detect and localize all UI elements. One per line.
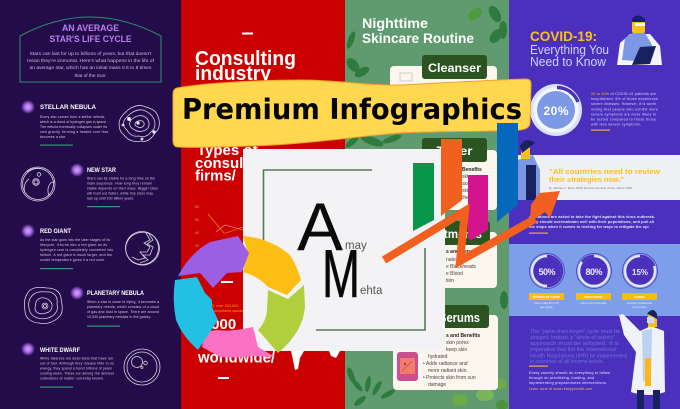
text: call to action: All nations are asked to take the fight against this virus outbreak. (529, 215, 655, 219)
stat: 15%: CASES (634, 295, 645, 299)
stage: stellar nebula: STELLAR NEBULA (40, 104, 96, 111)
closing text: implementing preparedness interventions. (529, 381, 607, 385)
quote strip: "All countries need to review (549, 169, 661, 176)
card: treatments: nate Skin (446, 257, 467, 263)
stage: planetary nebula: When a star is close to dying, it becomes a (87, 300, 159, 304)
stage: red giant: RED GIANT (40, 229, 71, 235)
heading: Need to Know (530, 55, 607, 69)
stage: stellar nebula: becomes a star. (40, 135, 66, 139)
donut: 20%: 20% (544, 104, 569, 118)
stat: 80%: 80% (586, 267, 602, 277)
card: serums (393, 305, 498, 390)
body text: The "panic-then-forget" cycle must be (530, 329, 620, 335)
body text (530, 329, 627, 365)
heading (530, 28, 609, 69)
doctor with clipboard (617, 16, 662, 65)
card: treatments: s and Benefits (446, 249, 480, 255)
stat: 50%: 50% (538, 267, 556, 277)
stage: stellar nebula: The nebula eventually collapses under its (40, 125, 107, 129)
card: toner: skin (462, 174, 471, 180)
panel: nighttime skincare (344, 0, 509, 409)
card: serums: hydrated (428, 354, 448, 360)
stage: planetary nebula: planetary nebula, which consists of a cloud (87, 305, 159, 309)
stage: new star: main sequence. How long they remain (87, 182, 152, 186)
card: treatments: Treatments (420, 229, 482, 241)
stat: 80%: INFECTIONS (584, 295, 603, 299)
stage: white dwarf (21, 342, 114, 388)
card: toner: Toner (436, 144, 473, 158)
stage: red giant: lifecycle, it turns into a red giant as its (40, 243, 107, 247)
paragraph: severe illnesses. However, it is worth (591, 102, 656, 106)
stage: stellar nebula: own gravity, forming a heated core that (40, 130, 108, 134)
stage: planetary nebula: PLANETARY NEBULA (87, 290, 144, 297)
stat: 50%: men in late 30 to 50 (534, 301, 559, 305)
card: serums: keep skin (446, 347, 467, 353)
card: serums: more radiant skin. (428, 368, 468, 374)
quote strip: their strategies now." (549, 177, 624, 184)
paragraph: severe symptoms are more likely to (591, 112, 656, 116)
stage: new star: last up until 100 billion years. (87, 196, 134, 200)
panel: star life cycle (0, 0, 181, 409)
logo letters: M (322, 236, 360, 312)
stat text (212, 304, 249, 313)
paragraph: noting that people who exhibit more (591, 108, 658, 112)
stage: planetary nebula: of gas and dust in space. There are around (87, 310, 159, 314)
heading: AN AVERAGE (62, 23, 119, 34)
card: treatments: e Blackheads (446, 264, 477, 270)
heading: Consulting (195, 47, 296, 70)
panel: consulting industry: ,000 (207, 316, 236, 333)
body text: imperative that the the International (530, 347, 616, 353)
quote strip (518, 155, 680, 200)
scientist figure (619, 310, 665, 409)
card: serums: s and Benefits (446, 333, 480, 339)
logo letters (297, 189, 383, 312)
card: serums: • Adds radiance and (423, 361, 468, 367)
card: cleanser (390, 55, 497, 91)
text: call to action: They should overmaintain well with their populations, and pull all (529, 220, 654, 224)
line chart: 40 (195, 231, 199, 235)
world map fragment (291, 351, 340, 370)
stat: 15%: Infection undetected (627, 301, 653, 305)
icon: nebula (119, 105, 159, 142)
body text: in countries of all income levels. (530, 359, 604, 365)
intro text: that of the Sun: (74, 73, 106, 78)
stage: red giant (21, 224, 113, 269)
quote strip: Dr. Michael J. Ryan, WHO Director-General, Press, March 2020 (549, 186, 632, 190)
segment: green (258, 285, 305, 353)
stage: planetary nebula: 10,000 planetary nebulas in the galaxy. (87, 315, 151, 319)
logo letters: A (297, 189, 344, 265)
card: treatments (420, 221, 497, 288)
intro text: Stars can last for up to billions of years, but that doesn't (30, 51, 152, 56)
card: treatments: tion (446, 278, 454, 284)
stage: stellar nebula (21, 100, 108, 146)
card: toner: the (462, 195, 469, 201)
stage: red giant: helium. A red giant is much larger, and the (40, 253, 112, 257)
line chart: 30 (195, 244, 199, 248)
heading: Nighttime (362, 16, 429, 31)
logo letters: may (345, 240, 367, 252)
closing text: through on prioritizing, funding, and (529, 376, 594, 380)
stage: red giant: As the star goes into the later stages of its (40, 238, 110, 242)
stage: white dwarf: energy, they spend a trend billions of years (40, 366, 112, 370)
line chart: 50 (195, 218, 199, 222)
stage: red giant: hydrogen core is completely converted into (40, 248, 113, 252)
stat: 50% (529, 254, 564, 309)
leaves (344, 4, 508, 409)
heading: STAR'S LIFE CYCLE (50, 34, 132, 45)
stage: white dwarf: collections of matter currently known. (40, 376, 104, 380)
stat: 50%: WOMEN OF COVID (533, 295, 561, 299)
stage: red giant: cooler temperature gives it a red color. (40, 258, 105, 262)
card: cleanser: Cleanser (428, 61, 481, 75)
card: toner: skin (462, 188, 471, 194)
body text: Health Regulations (IHR) be implemented (530, 354, 627, 360)
icon: planetary nebula (24, 287, 62, 324)
heading (50, 23, 132, 45)
stat: 50%: age group. (540, 305, 553, 309)
stat: 80% (576, 254, 612, 305)
logo letters: ehta (360, 285, 383, 297)
paragraph (591, 92, 658, 126)
card: serums: skin pores (446, 340, 469, 346)
card: serums: Serums (439, 311, 480, 325)
banner: premium infographics: Premium Infographics (182, 93, 522, 126)
stat text: 5, over 200,000 (212, 304, 238, 308)
stage: new star: Stars can be stable for a long time on the (87, 176, 155, 180)
stage: new star (70, 163, 158, 207)
subheading: firms/ (195, 168, 237, 184)
icon: white dwarf (124, 349, 160, 385)
donut cycle diagram (174, 236, 305, 357)
heading: Skincare Routine (362, 31, 474, 46)
subheading: consulting (195, 155, 271, 172)
line chart (195, 205, 243, 248)
stage: stellar nebula: Every star comes from a stellar nebula, (40, 115, 105, 119)
stage: stellar nebula: which is a cloud of hydrogen gas in space. (40, 120, 107, 124)
text: call to action (529, 215, 655, 229)
segment: yellow (243, 236, 301, 295)
closing text (529, 371, 610, 391)
band: statistics (509, 244, 680, 316)
paragraph: 20 to 30% of COVID-19 patients are (591, 92, 656, 96)
card: toner: ace (462, 181, 470, 187)
panel: consulting industry: worldwide/ (197, 350, 276, 366)
stage: white dwarf: out of fuel. Although they release little to no (40, 362, 114, 366)
heading: industry (195, 62, 272, 85)
segment: purple (178, 236, 249, 288)
stat: 80%: mild or asymptomatic (580, 301, 607, 305)
line chart: 60 (195, 205, 199, 209)
logo card (243, 149, 445, 351)
panel: covid-19 (509, 0, 680, 409)
stage: new star: stable depends on their mass. Bigger stars (87, 186, 158, 190)
subheading (195, 142, 271, 184)
heading (362, 16, 474, 46)
stage: white dwarf: White dwarves are dead stars that have ran (40, 356, 113, 360)
closing text: Learn more at www.readyprovide.com (529, 387, 592, 391)
stat text: consultants worldwide (212, 309, 249, 313)
card: serums: • Protects skin from sun (423, 375, 476, 381)
subheading: Types of (197, 142, 259, 159)
text: call to action: the stops when it comes to looking for ways to mitigate the spr (529, 225, 650, 229)
intro text (27, 51, 155, 78)
nurse figure (518, 140, 540, 200)
paragraph: with less severe symptoms. (591, 122, 641, 126)
card: toner: Benefits (462, 167, 482, 173)
stage: new star: NEW STAR (87, 168, 117, 174)
stage: white dwarf: cooling down. These are among the densest (40, 372, 114, 376)
segment: blue (174, 277, 218, 350)
donut: 20% (530, 84, 582, 136)
chart: rising bars (413, 123, 518, 240)
icon: new star (21, 167, 55, 201)
banner: premium infographics (173, 79, 531, 147)
heading: Everything You (530, 43, 609, 57)
intro text: an average star, which has an initial mass 0.5 to 8 times (30, 65, 152, 70)
stat: 15%: 15% (632, 268, 648, 277)
card: serums: damage (428, 382, 446, 388)
arrow: zigzag growth (384, 191, 560, 261)
icon: serum bottle (397, 352, 418, 381)
closing text: Every country should do everything to follow (529, 371, 610, 375)
heading (195, 47, 296, 85)
stat: 15%: for persons (632, 305, 647, 309)
paragraph: hospitalized. 5% of those experience (591, 97, 658, 101)
stat: 15% (622, 254, 658, 309)
heading: COVID-19: (530, 28, 597, 44)
stage: white dwarf: WHITE DWARF (40, 348, 80, 354)
stage: planetary nebula (70, 286, 159, 327)
body text: approach must be adopted. It is (530, 341, 619, 347)
arch frame (20, 17, 161, 82)
logo frame (264, 170, 425, 330)
body text: stopped. Instead, a "whole-of-society" (530, 335, 615, 341)
card: toner (390, 138, 497, 210)
stage: new star: will burn out faster, while tiny stars may (87, 192, 153, 196)
intro text: mean they're immortal. Here's what happens in the life of (27, 58, 155, 63)
card: treatments: e Blood (446, 271, 463, 277)
segment: pink (202, 327, 275, 357)
panel: consulting industry (181, 0, 345, 409)
icon: red giant (122, 228, 163, 269)
paragraph: be tested compared to those those (591, 118, 656, 122)
